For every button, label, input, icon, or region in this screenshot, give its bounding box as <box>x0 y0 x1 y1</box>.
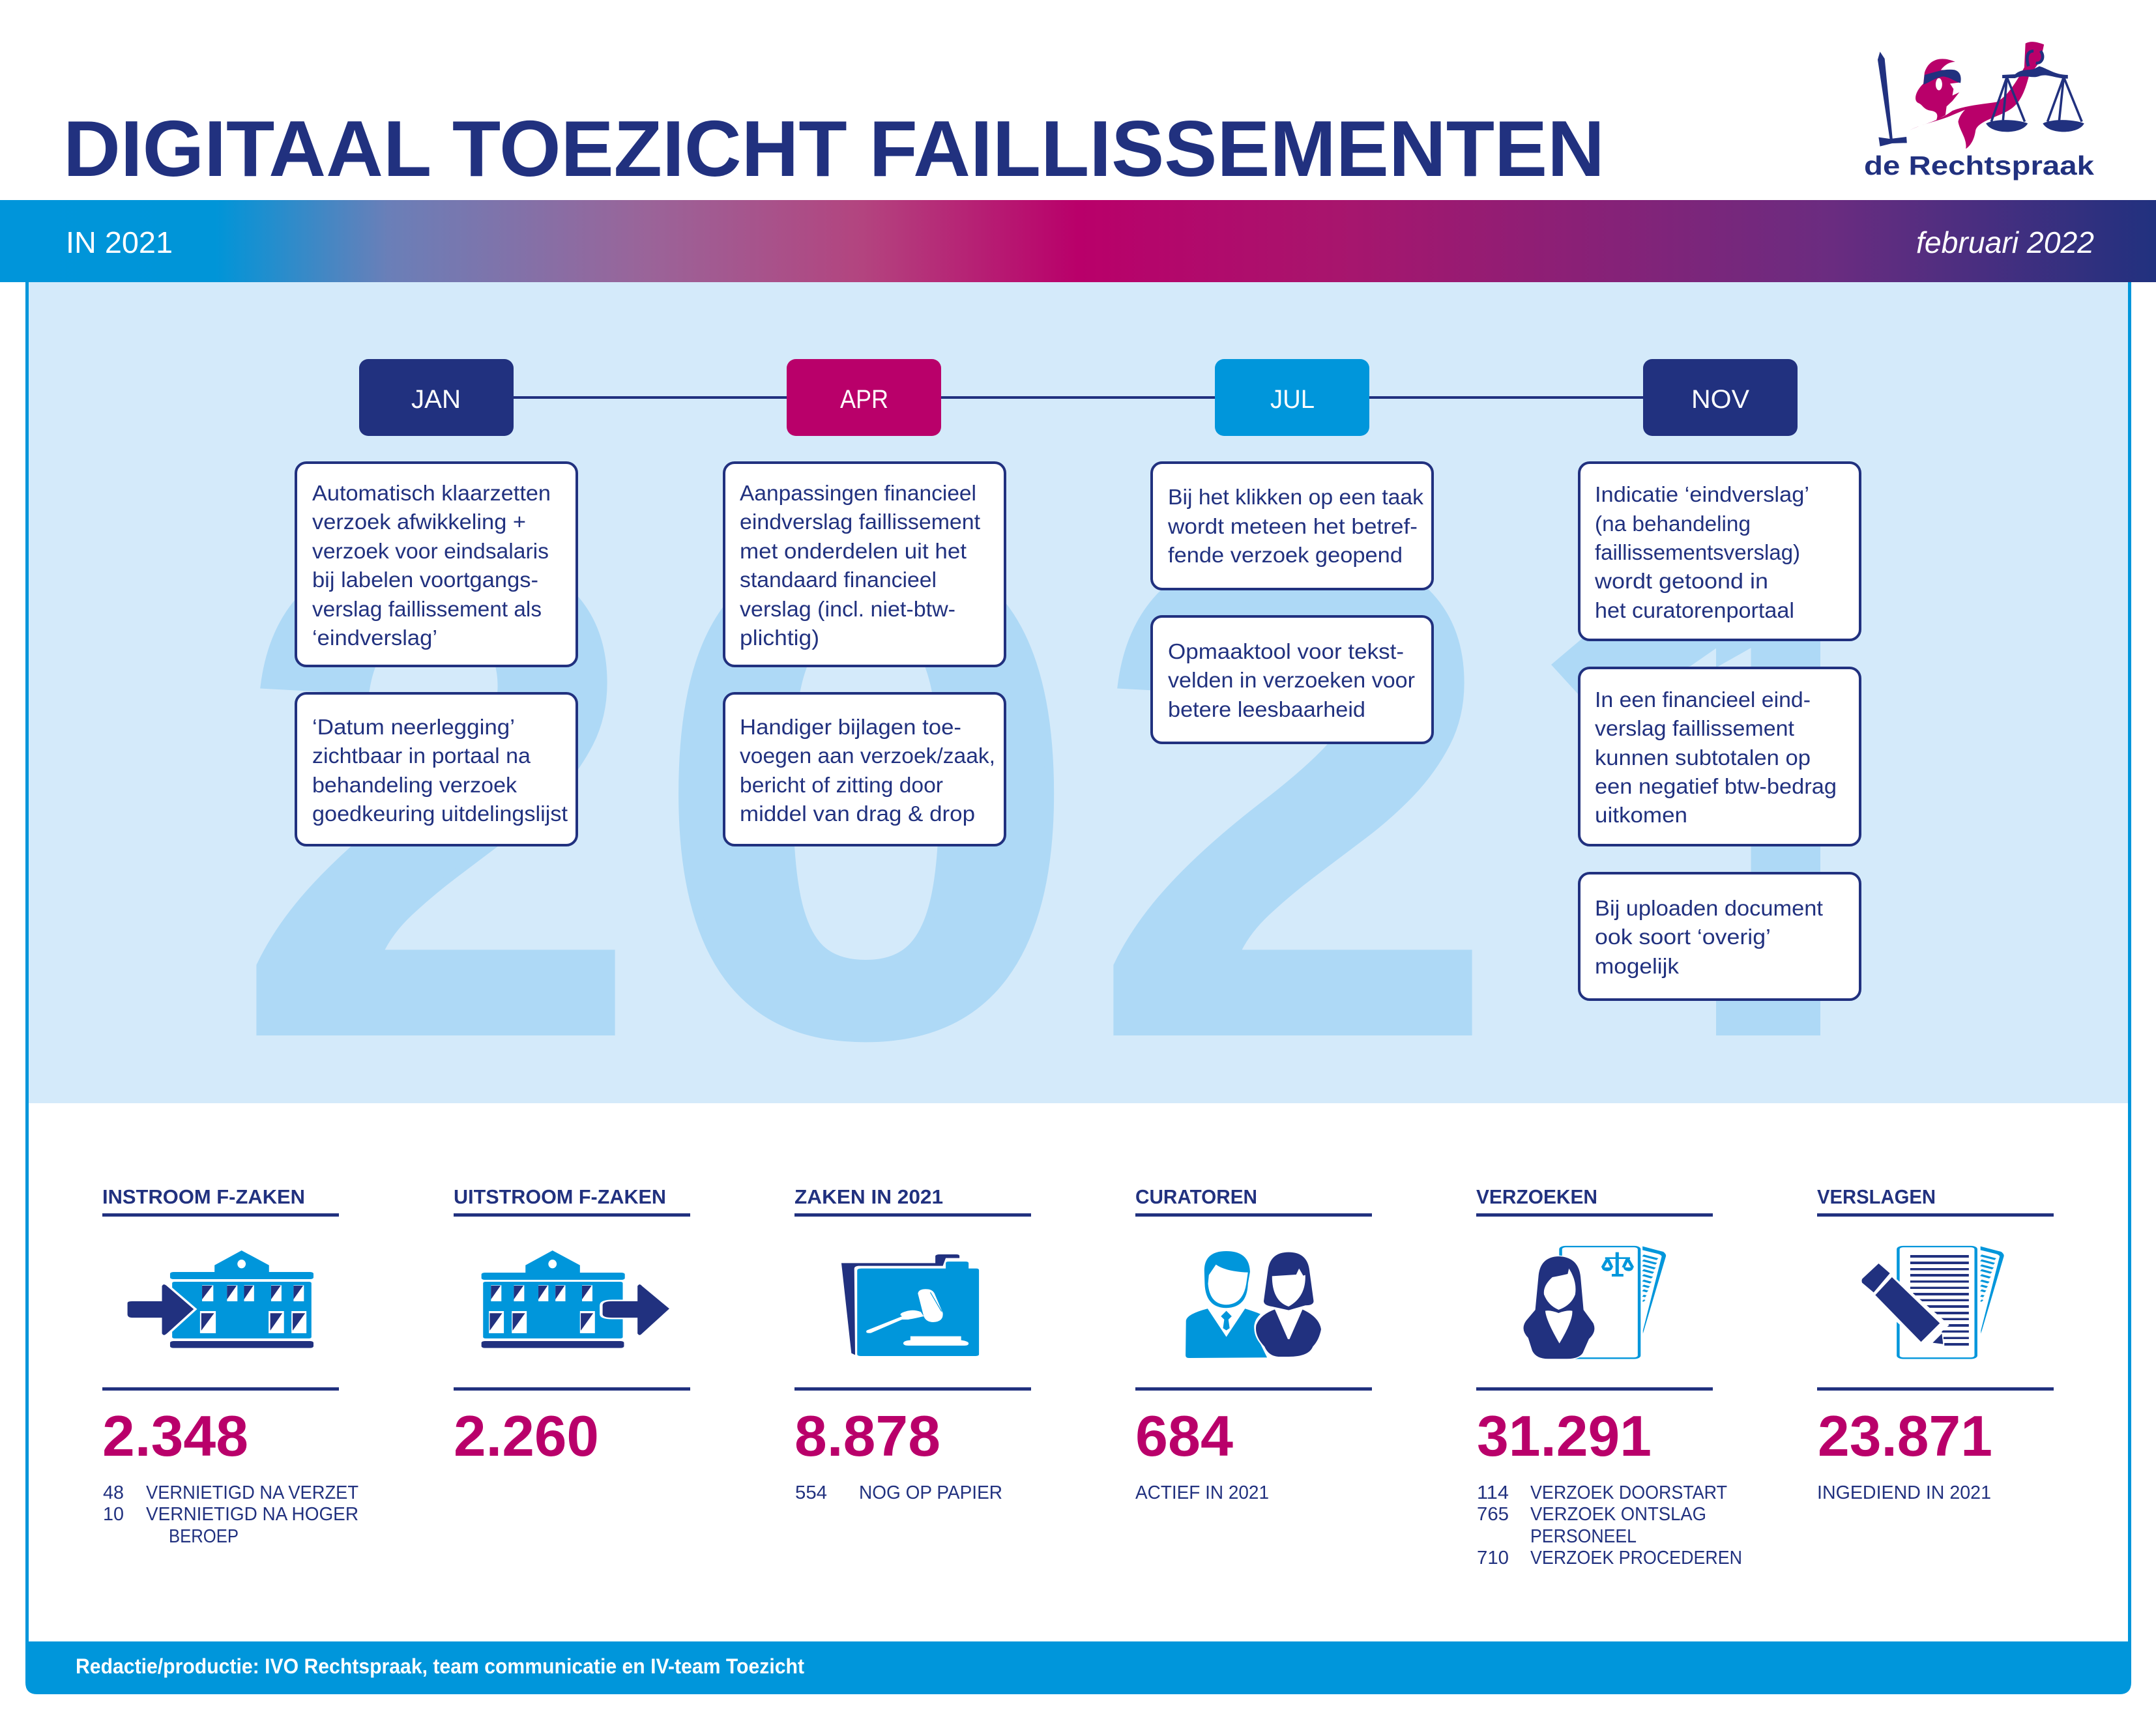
NOV card 1 <box>1579 463 1860 640</box>
details: ACTIEF IN 2021 <box>1135 1482 1269 1503</box>
APR card 2: Handiger bijlagen toe- <box>740 715 961 740</box>
details: 10 <box>103 1504 124 1525</box>
JAN card 2: behandeling verzoek <box>312 773 517 798</box>
title: DIGITAAL TOEZICHT FAILLISSEMENTEN <box>63 104 1605 193</box>
background year 2021: 2 <box>235 406 640 1178</box>
icon: building with incoming arrow <box>126 1250 313 1348</box>
number: 8.878 <box>794 1404 940 1468</box>
NOV card 2: In een financieel eind- <box>1595 688 1811 712</box>
details: BEROEP <box>169 1526 239 1547</box>
JAN card 2: ‘Datum neerlegging’ <box>312 715 515 740</box>
details: VERNIETIGD NA VERZET <box>146 1482 358 1503</box>
footer bar <box>25 1641 2131 1694</box>
stat: curatoren <box>1135 1185 1372 1503</box>
JAN card 1: verzoek voor eindsalaris <box>312 540 549 564</box>
heading: INSTROOM F-ZAKEN <box>102 1185 305 1208</box>
details: VERZOEK DOORSTART <box>1530 1482 1727 1503</box>
APR card 1: plichtig) <box>740 626 819 650</box>
month: NOV <box>1643 359 1798 436</box>
details: PERSONEEL <box>1530 1526 1637 1547</box>
icon: woman with request document <box>1522 1247 1666 1359</box>
details: VERNIETIGD NA HOGER <box>146 1504 358 1525</box>
background year 2021: 0 <box>652 406 1081 1178</box>
NOV card 3 <box>1579 873 1860 1000</box>
JAN card 2: goedkeuring uitdelingslijst <box>312 802 568 826</box>
JAN card 1: verslag faillissement als <box>312 598 542 622</box>
JUL card 2: velden in verzoeken voor <box>1168 669 1415 693</box>
JAN card 1: Automatisch klaarzetten <box>312 482 551 506</box>
NOV card 1: het curatorenportaal <box>1595 599 1794 623</box>
NOV card 1: (na behandeling <box>1595 512 1751 536</box>
JAN card 1: ‘eindverslag’ <box>312 626 437 650</box>
heading: VERSLAGEN <box>1817 1185 1936 1208</box>
banner date: februari 2022 <box>1916 225 2094 259</box>
JUL card 1 <box>1152 463 1433 589</box>
JUL card 1: Bij het klikken op een taak <box>1168 485 1423 510</box>
details: NOG OP PAPIER <box>859 1482 1002 1503</box>
details: 48 <box>103 1482 124 1503</box>
APR card 1: verslag (incl. niet-btw- <box>740 598 955 622</box>
stat: verslagen <box>1817 1185 2054 1503</box>
number: 2.260 <box>454 1404 599 1468</box>
details <box>795 1482 1002 1503</box>
details <box>103 1482 358 1547</box>
icon: building with outgoing arrow <box>482 1250 671 1348</box>
NOV card 3: ook soort ‘overig’ <box>1595 925 1771 949</box>
JUL card 2 <box>1152 616 1433 743</box>
JUL card 1: wordt meteen het betref- <box>1167 515 1418 539</box>
details <box>1477 1482 1742 1568</box>
number: 23.871 <box>1818 1404 1992 1468</box>
heading: CURATOREN <box>1135 1185 1257 1208</box>
icon: two curators <box>1186 1251 1322 1358</box>
NOV card 2: uitkomen <box>1595 803 1687 828</box>
month: JUL: JUL <box>1270 385 1315 414</box>
NOV card 2: kunnen subtotalen op <box>1595 746 1811 770</box>
NOV card 1: Indicatie ‘eindverslag’ <box>1595 483 1809 507</box>
APR card 1: met onderdelen uit het <box>740 540 967 564</box>
stat: instroom <box>102 1185 358 1547</box>
APR card 2 <box>724 693 1005 845</box>
background year 2021: 2 <box>1092 406 1497 1178</box>
icon: report with pencil <box>1862 1247 2004 1358</box>
month: JAN: JAN <box>411 385 461 414</box>
month: NOV: NOV <box>1691 385 1749 414</box>
background year 2021: 1 <box>1577 410 2002 1182</box>
timeline connector <box>508 396 1649 399</box>
number: 31.291 <box>1477 1404 1652 1468</box>
JAN card 1 <box>296 463 577 666</box>
details: 114 <box>1477 1482 1509 1503</box>
APR card 2: voegen aan verzoek/zaak, <box>740 744 995 768</box>
JUL card 2: betere leesbaarheid <box>1168 698 1365 722</box>
APR card 2: middel van drag & drop <box>740 802 975 826</box>
gradient banner <box>0 200 2156 282</box>
icon: case folder with gavel <box>841 1254 979 1356</box>
JAN card 2: zichtbaar in portaal na <box>312 744 531 768</box>
NOV card 2: verslag faillissement <box>1595 717 1795 741</box>
background year 2021 <box>256 589 1820 1043</box>
frame left border <box>25 282 29 1644</box>
details: 554 <box>795 1482 827 1503</box>
NOV card 2: een negatief btw-bedrag <box>1595 775 1837 799</box>
logo: de Rechtspraak <box>1864 42 2094 181</box>
timeline panel background <box>29 282 2128 1103</box>
details: VERZOEK PROCEDEREN <box>1530 1548 1742 1568</box>
NOV card 1: wordt getoond in <box>1594 570 1768 594</box>
APR card 1: eindverslag faillissement <box>740 510 981 534</box>
JAN card 1: verzoek afwikkeling + <box>312 510 526 534</box>
details: 710 <box>1477 1548 1509 1568</box>
NOV card 3: mogelijk <box>1595 955 1679 979</box>
number: 684 <box>1135 1404 1233 1468</box>
JAN card 1: bij labelen voortgangs- <box>312 568 538 592</box>
details: INGEDIEND IN 2021 <box>1817 1482 1991 1503</box>
banner subtitle: IN 2021 <box>66 225 173 259</box>
heading: VERZOEKEN <box>1476 1185 1597 1208</box>
number: 2.348 <box>102 1404 248 1468</box>
NOV card 3: Bij uploaden document <box>1595 897 1824 921</box>
NOV card 1: faillissementsverslag) <box>1595 541 1800 565</box>
stat: verzoeken <box>1476 1185 1742 1568</box>
JUL card 1: fende verzoek geopend <box>1168 543 1403 568</box>
month: JAN <box>359 359 514 436</box>
month: APR <box>787 359 941 436</box>
JUL card 2: Opmaaktool voor tekst- <box>1168 640 1404 664</box>
heading: UITSTROOM F-ZAKEN <box>454 1185 666 1208</box>
footer credit: Redactie/productie: IVO Rechtspraak, team communicatie en IV-team Toezicht <box>76 1654 804 1678</box>
details: 765 <box>1477 1504 1509 1525</box>
APR card 1 <box>724 463 1005 666</box>
APR card 1: standaard financieel <box>740 568 937 592</box>
JAN card 2 <box>296 693 577 845</box>
APR card 1: Aanpassingen financieel <box>740 482 976 506</box>
NOV card 2 <box>1579 668 1860 845</box>
month: JUL <box>1215 359 1369 436</box>
frame right border <box>2128 282 2131 1644</box>
month: APR: APR <box>840 385 888 414</box>
heading: ZAKEN IN 2021 <box>794 1185 943 1208</box>
stat: uitstroom <box>454 1185 690 1468</box>
logo: de Rechtspraak: de Rechtspraak <box>1864 151 2094 181</box>
stat: zaken <box>794 1185 1031 1503</box>
APR card 2: bericht of zitting door <box>740 773 943 798</box>
details: VERZOEK ONTSLAG <box>1530 1504 1706 1525</box>
